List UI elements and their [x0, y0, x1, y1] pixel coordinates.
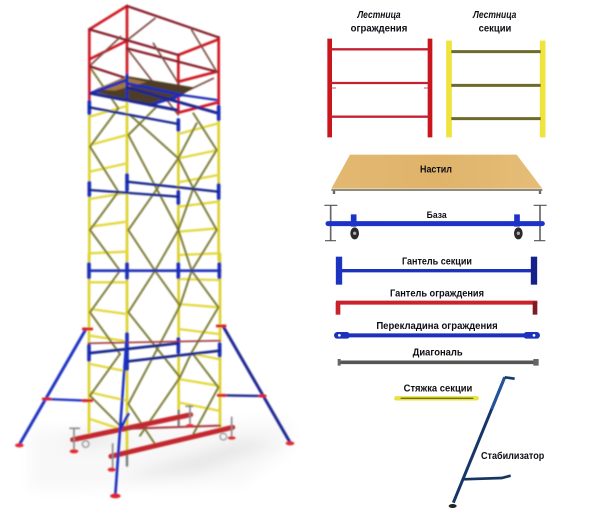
diagonal braces: [90, 68, 217, 271]
upper tower section: [89, 6, 219, 271]
label: ladder guard: ограждения: [351, 23, 407, 34]
guard crossbar: Перекладина ограждения: [376, 321, 498, 332]
ground shadow: [30, 420, 290, 490]
parts: bars and stabilizer: [336, 257, 544, 508]
blue horizontals: [89, 75, 219, 203]
label: ladder section: [472, 10, 517, 34]
label: ladder guard: [351, 10, 407, 34]
front stabilizer: [115, 337, 128, 495]
base: [324, 205, 547, 241]
yellow posts: [89, 100, 219, 260]
label: base: База: [427, 210, 447, 220]
grey post feet: [127, 411, 179, 466]
stabilizer left: [19, 329, 88, 445]
diagonal: Диагональ: [413, 347, 463, 358]
lower diagonal braces: [90, 271, 218, 444]
guard dumbbell: Гантель ограждения: [390, 289, 484, 300]
lower tower section: [15, 254, 294, 498]
label: ladder section: Лестница: [472, 10, 517, 21]
stabilizer right: [220, 327, 290, 442]
ladder guard: [330, 39, 430, 137]
label: ladder guard: Лестница: [356, 10, 401, 21]
label: ladder section: секции: [479, 23, 511, 34]
deck: [331, 155, 542, 194]
lower yellow rungs: [90, 279, 218, 429]
jacks and casters: [70, 406, 232, 469]
thin red guard bar: [88, 341, 220, 343]
stabilizer: Стабилизатор: [481, 451, 544, 462]
label: deck: Настил: [420, 164, 452, 175]
section tie: Стяжка секции: [404, 384, 472, 395]
base beams: [73, 415, 233, 456]
parts: ladders, deck, base: [324, 10, 547, 241]
section dumbbell: Гантель секции: [402, 257, 472, 268]
platform deck: [91, 76, 194, 104]
yellow rungs: [90, 106, 218, 255]
red guard frames: [89, 6, 219, 113]
blue cross bars: [89, 264, 220, 369]
ladder section: [449, 41, 543, 137]
stabilizer: [449, 377, 544, 508]
scaffold tower: [15, 6, 294, 498]
lower yellow posts: [89, 254, 220, 451]
section tie: [396, 384, 477, 398]
